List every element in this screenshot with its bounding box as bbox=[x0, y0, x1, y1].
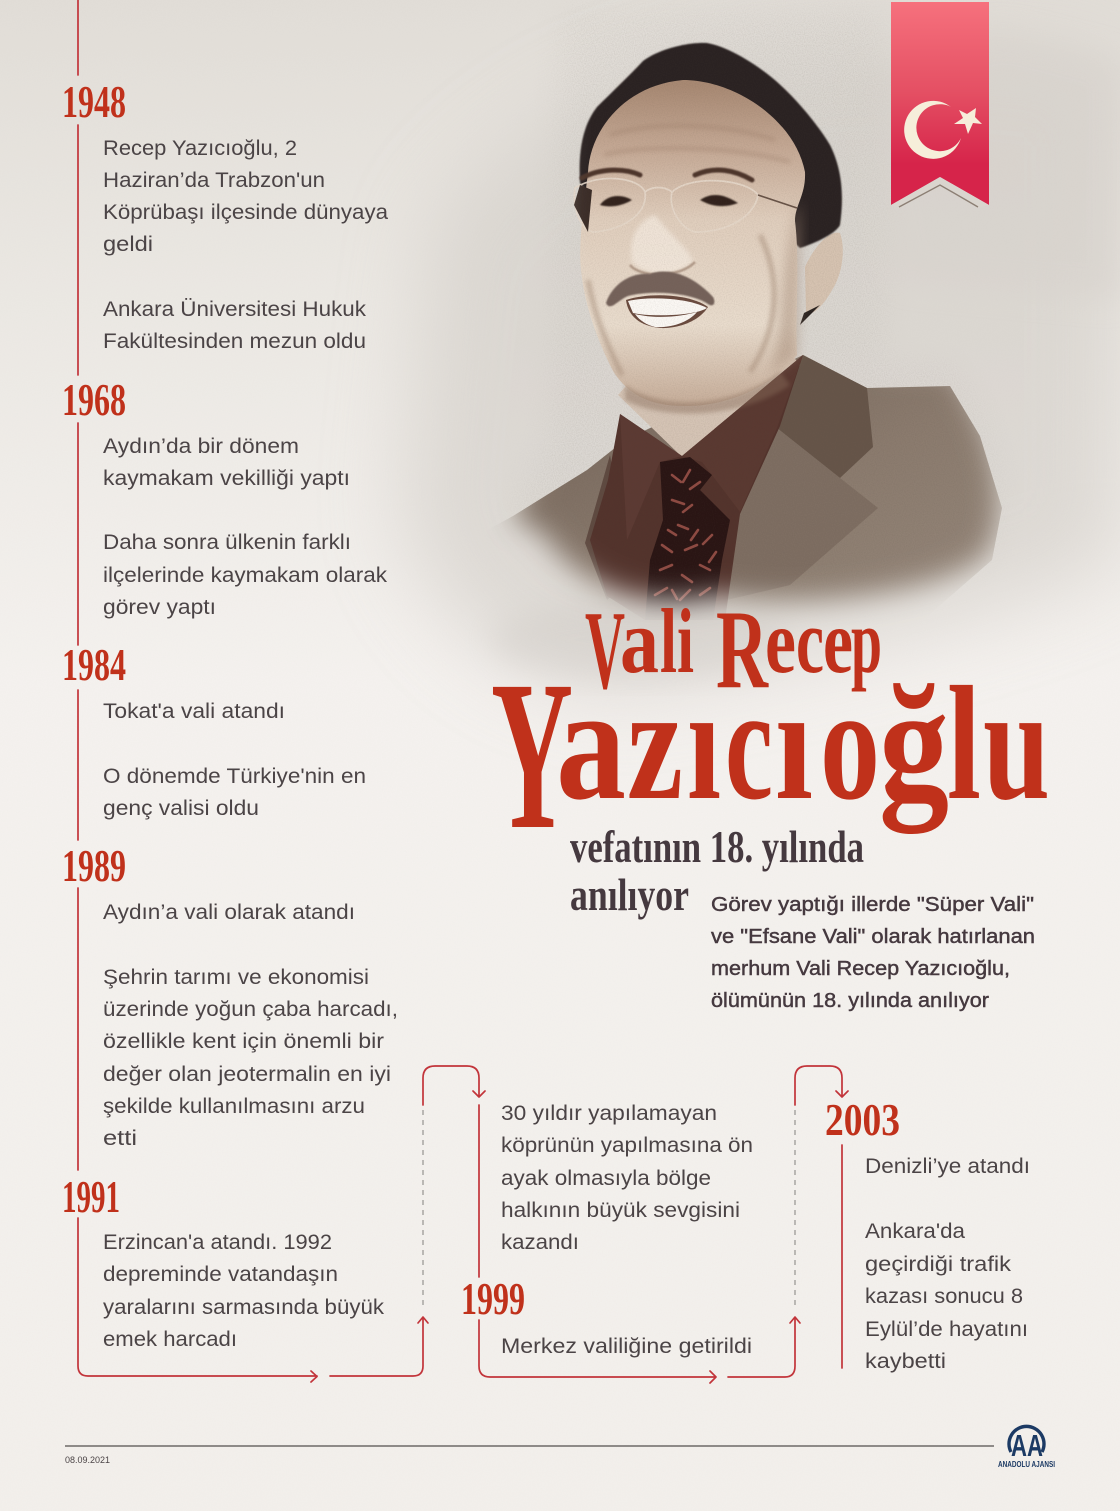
title line: Vali Recep: a bbox=[620, 590, 659, 692]
timeline entry 1991: Erzincan'a atandı. 1992 bbox=[103, 1230, 332, 1254]
timeline entry 1991 bbox=[62, 1172, 384, 1351]
1991 continued text: köprünün yapılmasına ön bbox=[501, 1133, 753, 1157]
timeline entry 1984 bbox=[62, 640, 366, 820]
portrait photo bbox=[460, 40, 1010, 640]
timeline entry 1999: Merkez valiliğine getirildi bbox=[501, 1334, 752, 1358]
photo grain bbox=[526, 11, 990, 503]
1991 continued text: ayak olmasıyla bölge bbox=[501, 1166, 711, 1190]
eyes bbox=[600, 195, 738, 206]
right side face shading bbox=[770, 200, 800, 375]
timeline entry 1968: Aydın’da bir dönem bbox=[103, 434, 299, 458]
timeline entry 2003: geçirdiği trafik bbox=[865, 1252, 1011, 1276]
timeline entry 1989: şekilde kullanılmasını arzu bbox=[103, 1094, 365, 1118]
title line: Yazıcıoğlu: ğ bbox=[879, 654, 949, 834]
intro paragraph: Görev yaptığı illerde "Süper Vali" bbox=[711, 894, 1034, 916]
cheek crease bbox=[588, 235, 774, 375]
timeline entry 1999: 1999 bbox=[461, 1274, 525, 1324]
suit bbox=[502, 355, 1002, 620]
timeline entry 1991: yaralarını sarmasında büyük bbox=[103, 1295, 384, 1319]
title line: Vali Recep: e bbox=[765, 590, 796, 692]
tie bbox=[645, 457, 730, 620]
chin shadow bbox=[625, 372, 790, 414]
timeline entry 1989: özellikle kent için önemli bir bbox=[103, 1029, 384, 1053]
flag ribbon bbox=[891, 2, 989, 208]
hair bbox=[580, 43, 842, 248]
timeline entry 2003: kaybetti bbox=[865, 1349, 946, 1373]
timeline entry 1968: kaymakam vekilliği yaptı bbox=[103, 466, 350, 490]
title line: Yazıcıoğlu: z bbox=[627, 654, 683, 834]
timeline entry 1948: Ankara Üniversitesi Hukuk bbox=[103, 297, 366, 321]
timeline entry 1989: değer olan jeotermalin en iyi bbox=[103, 1062, 391, 1086]
title line: Vali Recep: V bbox=[585, 589, 625, 713]
title line: Yazıcıoğlu: c bbox=[725, 654, 773, 834]
title bbox=[491, 588, 1050, 874]
timeline entry 1948: geldi bbox=[103, 232, 153, 256]
timeline entry 1968 bbox=[62, 375, 387, 619]
timeline entry 1948: 1948 bbox=[62, 77, 126, 127]
subtitle bbox=[570, 821, 864, 920]
icon: crescent bbox=[904, 101, 961, 159]
shirt bbox=[590, 355, 803, 620]
timeline entry 1989 bbox=[62, 841, 398, 1150]
title line: Yazıcıoğlu: ı bbox=[687, 654, 721, 834]
title line: Vali Recep: p bbox=[851, 590, 882, 692]
timeline entry 2003: Eylül’de hayatını bbox=[865, 1317, 1028, 1341]
ear bbox=[805, 233, 843, 314]
timeline entry 1984: Tokat'a vali atandı bbox=[103, 699, 285, 723]
timeline entry 1989: Aydın’a vali olarak atandı bbox=[103, 900, 355, 924]
title line: Yazıcıoğlu: ı bbox=[775, 654, 813, 834]
moustache bbox=[606, 272, 714, 306]
date: 08.09.2021 bbox=[65, 1455, 110, 1465]
title line: Yazıcıoğlu: o bbox=[820, 654, 880, 834]
right lapel bbox=[777, 355, 873, 478]
footer rule bbox=[65, 1445, 994, 1447]
timeline entry 1984: O dönemde Türkiye'nin en bbox=[103, 764, 366, 788]
forehead wrinkles bbox=[604, 126, 790, 162]
subtitle: vefatının 18. yılında bbox=[570, 821, 864, 872]
neck bbox=[618, 358, 800, 456]
title line: Vali Recep: R bbox=[716, 588, 769, 712]
shirt collar edges bbox=[620, 414, 682, 540]
timeline entry 1989: üzerinde yoğun çaba harcadı, bbox=[103, 997, 398, 1021]
title line: Yazıcıoğlu: l bbox=[947, 654, 981, 834]
timeline entry 1991: depreminde vatandaşın bbox=[103, 1262, 338, 1286]
timeline connector lines bbox=[78, 0, 848, 1383]
title line: Vali Recep: e bbox=[823, 590, 853, 692]
timeline entry 1948: Haziran’da Trabzon'un bbox=[103, 168, 325, 192]
timeline entry 2003 bbox=[825, 1095, 1030, 1373]
intro paragraph: merhum Vali Recep Yazıcıoğlu, bbox=[711, 958, 1010, 980]
left lapel bbox=[585, 456, 612, 600]
intro paragraph: ölümünün 18. yılında anılıyor bbox=[711, 990, 989, 1012]
timeline entry 1991: emek harcadı bbox=[103, 1327, 237, 1351]
timeline entry 1968: 1968 bbox=[62, 375, 126, 425]
intro paragraph: ve "Efsane Vali" olarak hatırlanan bbox=[711, 926, 1035, 948]
title line: Vali Recep: l bbox=[660, 590, 677, 692]
timeline entry 2003: Denizli’ye atandı bbox=[865, 1154, 1030, 1178]
title line: Vali Recep: c bbox=[796, 590, 824, 692]
glasses bbox=[574, 178, 797, 232]
timeline entry 1948: Fakültesinden mezun oldu bbox=[103, 329, 366, 353]
nose bbox=[631, 215, 693, 274]
timeline entry 1989: 1989 bbox=[62, 841, 126, 891]
1991 continued text bbox=[501, 1101, 753, 1254]
title line: Vali Recep: i bbox=[677, 590, 694, 692]
timeline entry 1948: Köprübaşı ilçesinde dünyaya bbox=[103, 200, 388, 224]
title line: Yazıcıoğlu: Y bbox=[491, 637, 573, 874]
timeline entry 1948 bbox=[62, 77, 388, 353]
timeline entry 1989: etti bbox=[103, 1126, 137, 1150]
1991 continued text: 30 yıldır yapılamayan bbox=[501, 1101, 717, 1125]
ribbon fold band bbox=[891, 177, 989, 208]
subtitle: anılıyor bbox=[570, 869, 689, 920]
timeline entry 1968: Daha sonra ülkenin farklı bbox=[103, 530, 351, 554]
timeline entry 1984: genç valisi oldu bbox=[103, 796, 259, 820]
logo: Anadolu Ajansı bbox=[998, 1426, 1055, 1469]
timeline entry 1968: ilçelerinde kaymakam olarak bbox=[103, 563, 387, 587]
icon: star bbox=[954, 108, 982, 134]
timeline entry 2003: Ankara'da bbox=[865, 1219, 965, 1243]
1991 continued text: kazandı bbox=[501, 1230, 579, 1254]
timeline entry 2003: kazası sonucu 8 bbox=[865, 1284, 1023, 1308]
timeline entry 2003: 2003 bbox=[825, 1095, 900, 1145]
face bbox=[580, 80, 805, 406]
mouth bbox=[626, 295, 708, 328]
timeline entry 1968: görev yaptı bbox=[103, 595, 216, 619]
logo: Anadolu Ajansı: AA bbox=[1011, 1428, 1043, 1463]
timeline entry 1999 bbox=[461, 1274, 752, 1358]
title line: Yazıcıoğlu: u bbox=[983, 654, 1050, 834]
timeline entry 1991: 1991 bbox=[62, 1172, 120, 1222]
timeline entry 1948: Recep Yazıcıoğlu, 2 bbox=[103, 136, 297, 160]
timeline entry 1989: Şehrin tarımı ve ekonomisi bbox=[103, 965, 369, 989]
timeline entry 1984: 1984 bbox=[62, 640, 126, 690]
eyebrows bbox=[582, 170, 752, 180]
1991 continued text: halkının büyük sevgisini bbox=[501, 1198, 740, 1222]
logo: Anadolu Ajansı: ANADOLU AJANSI bbox=[998, 1459, 1055, 1469]
title line: Yazıcıoğlu: a bbox=[556, 654, 626, 834]
intro paragraph bbox=[711, 894, 1035, 1012]
